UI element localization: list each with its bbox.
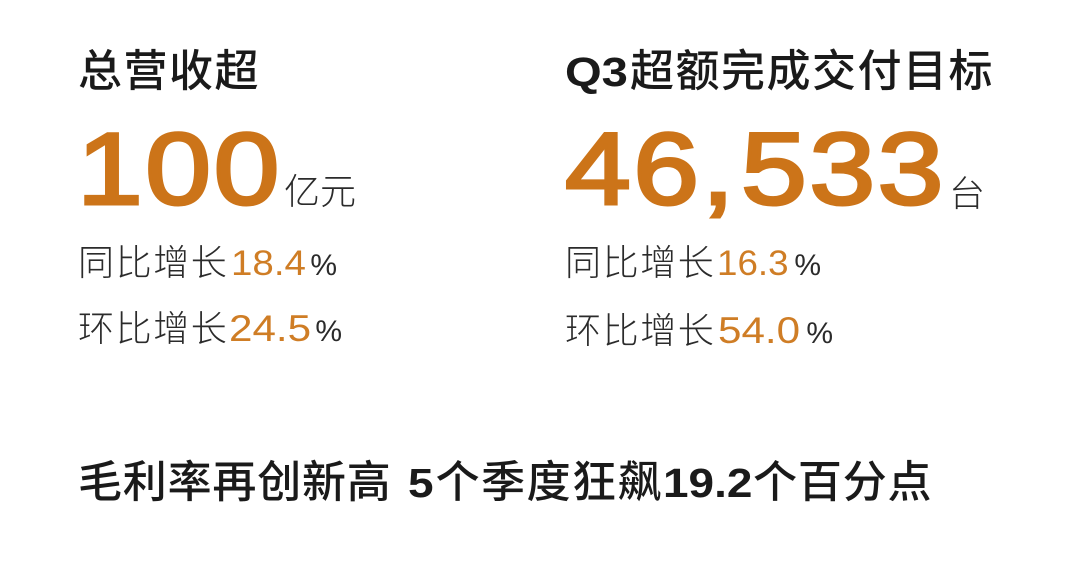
- bottom headline: gross margin: 毛利率再创新高 个季度狂飙 个百分点: [78, 458, 932, 507]
- unit: vehicles: 台: [949, 173, 985, 214]
- unit: yi yuan: 亿元: [284, 171, 356, 212]
- heading: Q3 deliveries: Q3: [565, 49, 628, 95]
- heading: Q3 deliveries: 超额完成交付目标: [630, 47, 994, 96]
- heading: total revenue: 总营收超: [78, 47, 260, 96]
- stat: revenue QoQ: 24.5: [229, 308, 312, 349]
- stat: deliveries QoQ: 环比增长 %: [565, 310, 833, 351]
- stat: deliveries YoY: 16.3: [717, 244, 789, 283]
- stat: deliveries QoQ: 54.0: [718, 310, 801, 351]
- bottom headline: gross margin: 5: [408, 460, 433, 506]
- stat: deliveries YoY: 同比增长 %: [565, 242, 821, 283]
- stat: revenue QoQ: 环比增长 %: [78, 308, 342, 349]
- stat: revenue YoY: 18.4: [231, 244, 306, 283]
- stat: revenue YoY: 同比增长 %: [78, 242, 337, 283]
- big number: 46,533: 46,533: [565, 112, 946, 226]
- bottom headline: gross margin: 19.2: [663, 460, 752, 506]
- big number: 100: 100: [77, 112, 282, 226]
